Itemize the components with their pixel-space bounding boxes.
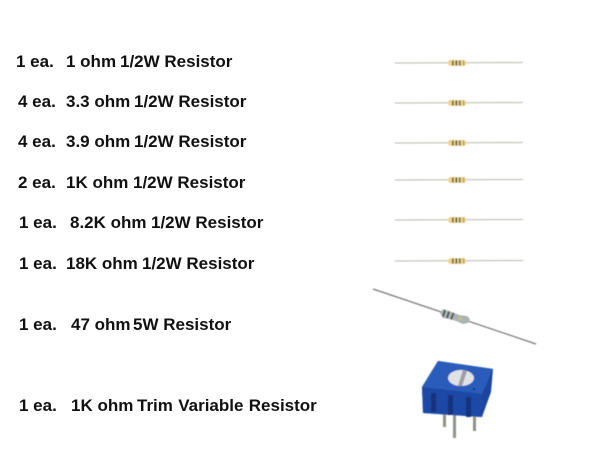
parts list row: 8.2K ohm [19,213,264,232]
parts list row: 47 ohm 5W: 47 ohm [71,315,131,334]
parts list row: 1K ohm: 1K ohm [66,173,128,192]
parts list row: 1K ohm: 2 ea. [18,173,56,192]
parts list row: 47 ohm 5W: 5W Resistor [133,315,231,334]
parts list row: 1 ohm: 1/2W Resistor [120,52,232,71]
parts list row: 3.3 ohm [18,92,246,111]
parts list row: 1 ohm: 1 ea. [16,52,54,71]
icon: 5W resistor [373,289,536,344]
parts list row: 3.9 ohm [18,132,246,151]
parts list row: 3.3 ohm: 1/2W Resistor [134,92,246,111]
parts list row: 8.2K ohm: 8.2K ohm [70,213,147,232]
parts list row: 47 ohm 5W: 1 ea. [19,315,57,334]
parts list row: 1K trim variable: Trim Variable Resistor [137,396,317,415]
icon: resistor 4 [395,177,523,183]
parts list row: 8.2K ohm: 1 ea. [19,213,57,232]
parts list row: 3.3 ohm: 3.3 ohm [66,92,130,111]
icon: resistor 3 [395,140,523,146]
parts list row: 47 ohm 5W [19,315,231,334]
parts list row: 1K ohm: 1/2W Resistor [133,173,245,192]
parts list row: 3.9 ohm: 4 ea. [18,132,56,151]
parts list row: 1K trim variable: 1 ea. [19,396,57,415]
parts list row: 1K trim variable: 1K ohm [71,396,133,415]
parts list row: 3.3 ohm: 4 ea. [18,92,56,111]
parts list row: 3.9 ohm: 1/2W Resistor [134,132,246,151]
parts list row: 1 ohm: 1 ohm [66,52,116,71]
parts list row: 18K ohm: 1/2W Resistor [142,254,254,273]
icon: resistor 2 [395,100,523,106]
icon: blue trim potentiometer [422,361,493,438]
icon: resistor 5 [395,217,523,223]
parts list row: 1K ohm [18,173,246,192]
icon: resistor 6 [395,258,523,264]
parts list row: 1 ohm [16,52,232,71]
parts list row: 8.2K ohm: 1/2W Resistor [151,213,263,232]
parts list row: 18K ohm: 18K ohm [66,254,138,273]
parts list row: 3.9 ohm: 3.9 ohm [66,132,130,151]
parts list row: 18K ohm [19,254,254,273]
parts list row: 1K trim variable [19,396,317,415]
parts list row: 18K ohm: 1 ea. [19,254,57,273]
icon: resistor 1 [395,60,523,66]
